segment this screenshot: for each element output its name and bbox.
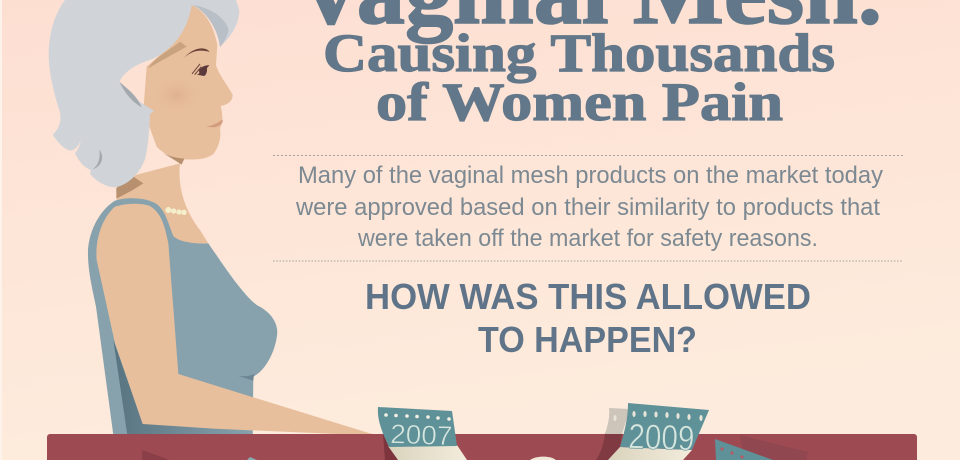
chin shadow (163, 153, 184, 165)
hair fold shadow side (119, 82, 142, 107)
top dashed divider (273, 154, 903, 156)
eyelashes (192, 64, 201, 75)
far right page holes (720, 447, 744, 459)
face (143, 5, 233, 160)
dress shadow behind arm (113, 340, 253, 435)
table shadow triangle (142, 450, 170, 460)
title line 2: Causing Thousands (323, 23, 835, 83)
paragraph line 3: were taken off the market for safety reasons. (357, 225, 818, 252)
woman torso and arm illustration (88, 198, 383, 436)
far right page shadow (740, 435, 808, 460)
neck shadow (116, 177, 143, 199)
neck (117, 163, 208, 243)
hair (49, 0, 239, 187)
perforation holes (384, 413, 451, 421)
back page on table (596, 433, 622, 460)
hair fold shadow front (193, 5, 229, 47)
back page (605, 408, 630, 434)
cheek blush (147, 73, 206, 117)
2009 page (596, 403, 709, 460)
cream curved page top (530, 457, 556, 460)
eyebrow (184, 48, 210, 58)
teal header (620, 403, 709, 450)
question heading (365, 276, 811, 360)
lips (206, 119, 223, 127)
underbust fold (238, 374, 254, 381)
woman head and hair illustration (49, 0, 239, 243)
arm (96, 204, 383, 436)
paragraph line 1: Many of the vaginal mesh products on the market today (298, 162, 883, 189)
title line 3: of Women Pain (376, 72, 783, 132)
year label 2009: 2009 (628, 417, 695, 458)
year label 2007: 2007 (390, 419, 453, 451)
2007 page (378, 407, 467, 460)
page paper (608, 447, 692, 460)
paragraph line 2: were approved based on their similarity to products that (295, 194, 880, 221)
far right teal page (715, 439, 773, 460)
teal header (378, 407, 457, 447)
heading line 2: TO HAPPEN? (478, 319, 697, 360)
bottom dotted divider (273, 260, 903, 262)
heading line 1: HOW WAS THIS ALLOWED (365, 276, 811, 317)
pearl necklace (165, 207, 187, 215)
page shadow (383, 434, 400, 460)
title (296, 0, 882, 132)
dress (88, 198, 277, 435)
hair shadow on forehead (148, 42, 187, 68)
timeline pages (378, 403, 808, 460)
intro paragraph (295, 162, 883, 252)
small teal fragment (247, 457, 257, 460)
perforation holes (613, 411, 703, 421)
eye (192, 64, 209, 76)
hair curl shadow (93, 149, 102, 169)
red timeline panel (47, 434, 917, 460)
page paper (388, 445, 467, 460)
